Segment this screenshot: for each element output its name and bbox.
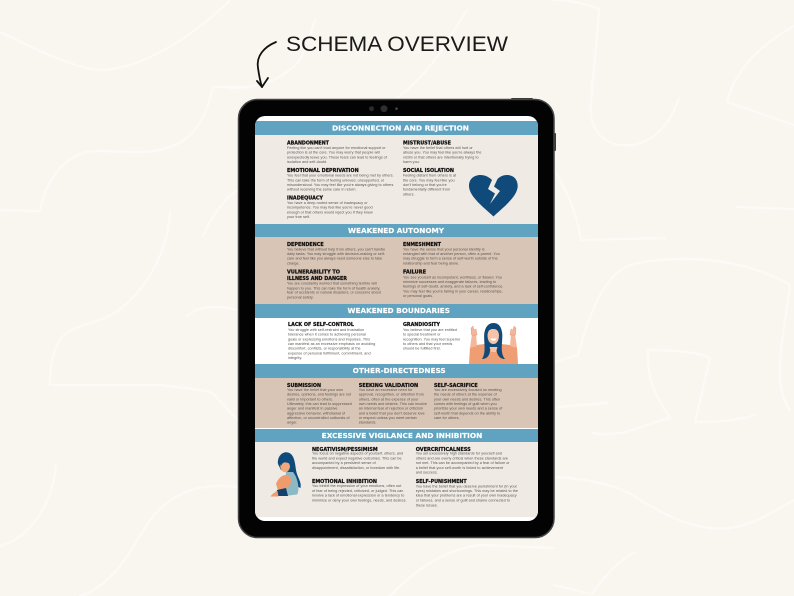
text: self-punishment: SELF-PUNISHMENT	[416, 479, 467, 485]
heading: disconnection and rejection: DISCONNECTION AND REJECTION	[332, 124, 469, 133]
heading: other-directedness: OTHER-DIRECTEDNESS	[353, 366, 446, 375]
text: seeking validation: approval, recognition, or attention from	[359, 393, 424, 397]
heading: excessive vigilance and inhibition	[255, 429, 538, 442]
text: negativism/pessimism: the world and expect negative outcomes. This can be	[312, 456, 402, 460]
text: mistrust/abuse: MISTRUST/ABUSE	[403, 140, 452, 146]
text: submission: anger and manifest in passive	[287, 407, 337, 411]
text: self-punishment	[416, 479, 518, 507]
text: submission: aggressive behavior, withdrawal of	[287, 411, 346, 415]
text: social isolation	[403, 168, 456, 196]
text: submission: affection, or uncontrolled outbursts of	[287, 416, 350, 420]
text: dependence: DEPENDENCE	[287, 242, 324, 248]
text: social isolation: don't belong or that you're	[403, 183, 447, 187]
text: abandonment: isolation and self-doubt.	[287, 160, 327, 164]
text: social isolation: others.	[403, 192, 415, 196]
panel: weakened boundaries	[255, 304, 538, 364]
icon: broken heart	[469, 175, 518, 216]
text: self-sacrifice: You are excessively focused on meeting	[434, 388, 502, 392]
text: self-punishment: eyes) mistakes and shortcomings. This may be related to the	[416, 489, 518, 493]
text: abandonment: unexpectedly leave you. These fears can lead to feelings of	[287, 155, 388, 159]
text: vulnerability to illness and danger: happen to you. This can take the form of health anxiety,	[287, 286, 380, 290]
text: negativism/pessimism: You focus on negative aspects of yourself, others, and	[312, 452, 403, 456]
text: self-sacrifice: comes with feelings of guilt when you	[434, 402, 497, 406]
text: seeking validation: others, often at the expense of your	[359, 397, 419, 401]
text: lack of self-control	[288, 322, 375, 360]
text: inadequacy: You have a deep-rooted sense of inadequacy or	[287, 201, 368, 205]
text: overcriticalness: and success.	[416, 471, 438, 475]
text: lack of self-control: goals or expressing emotions and impulses. This	[288, 337, 370, 341]
screen	[255, 116, 538, 521]
text: vulnerability to illness and danger: ILLNESS AND DANGER	[287, 276, 347, 282]
text: negativism/pessimism: NEGATIVISM/PESSIMISM	[312, 447, 378, 453]
text: emotional deprivation	[287, 168, 394, 192]
text: grandiosity: You believe that you are entitled	[403, 328, 457, 332]
camera	[369, 105, 398, 112]
arrow	[257, 42, 276, 87]
text: inadequacy	[287, 196, 373, 219]
text: abandonment: Feeling like you can't trust anyone for emotional support or	[287, 146, 386, 150]
text: inadequacy: your true self.	[287, 215, 310, 219]
text: emotional inhibition: minimize or deny your own feelings, needs, and desires.	[312, 499, 407, 503]
text: emotional deprivation: misunderstood. You may feel like you're always giving to others	[287, 183, 393, 187]
text: overcriticalness: OVERCRITICALNESS	[416, 447, 471, 453]
text: enmeshment: You have the sense that your personal identity is	[403, 247, 485, 251]
text: self-sacrifice: SELF-SACRIFICE	[434, 383, 478, 389]
text: seeking validation: SEEKING VALIDATION	[359, 383, 418, 389]
text: vulnerability to illness and danger: fear of accidents or natural disasters, or concerns about	[287, 291, 381, 295]
text: social isolation: Feeling distant from others is at	[403, 174, 456, 178]
text: lack of self-control: discomfort, conflicts, or responsibility at the	[288, 347, 361, 351]
text: vulnerability to illness and danger: VULNERABILITY TO	[287, 270, 340, 276]
text: submission: valid or important to others.	[287, 397, 333, 401]
heading: other-directedness	[255, 364, 538, 378]
text: inadequacy: INADEQUACY	[287, 196, 323, 202]
text: lack of self-control: can manifest as an excessive emphasis on avoiding	[288, 342, 375, 346]
text: mistrust/abuse: victim or that others are intentionally trying to	[403, 155, 479, 159]
text: seeking validation: and a belief that you don't deserve love	[359, 411, 425, 415]
text: dependence: daily tasks. You may struggle with decision-making or self-	[287, 252, 386, 256]
text: self-sacrifice: your own needs and desires. This often	[434, 397, 500, 401]
panel: excessive vigilance and inhibition	[255, 429, 538, 517]
text: dependence	[287, 242, 386, 265]
text: abandonment	[287, 140, 388, 164]
text: inadequacy: enough or that others would reject you if they knew	[287, 210, 373, 214]
text: submission: You have the belief that your own	[287, 388, 343, 392]
text: emotional inhibition: You inhibit the expression of your emotions, often out	[312, 484, 401, 488]
text: failure: minimize successes and exaggerate failures, leading to	[403, 280, 496, 284]
text: overcriticalness: not met. This can be accompanied by a fear of failure or	[416, 461, 510, 465]
text: grandiosity	[403, 322, 461, 351]
text: social isolation: fundamentally different from	[403, 188, 450, 192]
text: grandiosity: recognition. You may feel superior	[403, 337, 461, 341]
text: submission: SUBMISSION	[287, 383, 321, 389]
text: self-sacrifice: care for others.	[434, 416, 460, 420]
text: emotional inhibition	[312, 479, 407, 503]
panel: disconnection and rejection	[255, 121, 538, 224]
text: overcriticalness	[416, 447, 510, 475]
text: dependence: You believe that without help from others, you can't handle	[287, 247, 385, 251]
text: enmeshment: entangled with that of another person, often a parent. You	[403, 252, 500, 256]
text: self-punishment: You have the belief that you deserve punishment for (in your	[416, 484, 518, 488]
text: dependence: charge.	[287, 261, 300, 265]
text: failure: or personal goals.	[403, 294, 433, 298]
heading: weakened autonomy: WEAKENED AUTONOMY	[348, 226, 445, 235]
text: emotional inhibition: EMOTIONAL INHIBITION	[312, 479, 377, 485]
text: negativism/pessimism	[312, 447, 403, 470]
text: submission: Ultimately, this can lead to suppressed	[287, 402, 352, 406]
text: negativism/pessimism: accompanied by a persistent sense of	[312, 461, 377, 465]
text: overcriticalness: a belief that your self-worth is linked to achievement	[416, 466, 503, 470]
text: negativism/pessimism: disappointment, dissatisfaction, or boredom with life.	[312, 466, 400, 470]
text: self-punishment: idea that your problems are a result of your own inadequacy	[416, 494, 517, 498]
text: submission: anger.	[287, 421, 298, 425]
title: SCHEMA OVERVIEW	[286, 33, 508, 56]
text: failure	[403, 270, 503, 298]
text: enmeshment: relationship and fear being alone.	[403, 261, 459, 265]
heading: weakened autonomy	[255, 224, 538, 237]
text: dependence: care and feel like you always need someone else to take	[287, 257, 382, 261]
text: vulnerability to illness and danger: personal safety.	[287, 295, 314, 299]
text: self-sacrifice: prioritize your own needs and a sense of	[434, 407, 503, 411]
icon: woman hugging knees	[270, 452, 301, 496]
text: grandiosity: should be fulfilled first.	[403, 347, 441, 351]
heading: excessive vigilance and inhibition: EXCESSIVE VIGILANCE AND INHIBITION	[322, 431, 482, 440]
heading: disconnection and rejection	[255, 121, 538, 135]
text: seeking validation: own needs and desires. This can involve	[359, 402, 427, 406]
text: lack of self-control: expense of personal fulfillment, commitment, and	[288, 351, 371, 355]
text: self-sacrifice	[434, 383, 503, 420]
text: emotional deprivation: without receiving the same care in return.	[287, 188, 357, 192]
text: seeking validation: You have an excessive need for	[359, 388, 413, 392]
text: grandiosity: to others and that your needs	[403, 342, 453, 346]
text: emotional deprivation: This can take the form of feeling unloved, unsupported, or	[287, 178, 385, 182]
text: overcriticalness: You set excessively high standards for yourself and	[416, 452, 502, 456]
text: vulnerability to illness and danger: You are constantly worried that something terrible will	[287, 282, 377, 286]
text: social isolation: the core. You may feel like you	[403, 178, 455, 182]
text: self-sacrifice: self-worth that depends on the ability to	[434, 411, 500, 415]
text: seeking validation: or respect unless you meet certain	[359, 416, 417, 420]
text: overcriticalness: others and are overly critical when these standards are	[416, 456, 508, 460]
text: lack of self-control: LACK OF SELF-CONTROL	[288, 322, 355, 328]
text: emotional inhibition: involve a lack of emotional expression or a tendency to	[312, 494, 404, 498]
text: abandonment: protection is at the core. You may worry that people will	[287, 151, 380, 155]
text: abandonment: ABANDONMENT	[287, 140, 330, 146]
text: enmeshment: may struggle to form a sense of self-worth outside of the	[403, 257, 498, 261]
text: mistrust/abuse: abuse you. You may feel like you're always the	[403, 151, 481, 155]
text: emotional inhibition: of fear of being rejected, criticized, or judged. This can	[312, 489, 403, 493]
text: submission: desires, opinions, and feelings are not	[287, 393, 351, 397]
panel: other-directedness	[255, 364, 538, 428]
text: inadequacy: incompetence. You may feel like you're never good	[287, 206, 373, 210]
text: vulnerability to illness and danger	[287, 270, 381, 299]
text: failure: feelings of self-doubt, anxiety, and a lack of self-confidence.	[403, 285, 503, 289]
text: lack of self-control: integrity.	[288, 356, 302, 360]
text: mistrust/abuse	[403, 140, 481, 164]
text: seeking validation: an internal fear of rejection or criticism	[359, 407, 423, 411]
icon: woman with raised hands	[469, 323, 518, 364]
heading: weakened boundaries	[255, 304, 538, 318]
panel: weakened autonomy	[255, 224, 538, 304]
heading: weakened boundaries: WEAKENED BOUNDARIES	[348, 306, 450, 315]
text: enmeshment	[403, 242, 500, 265]
text: self-punishment: or failures, and a sense of guilt and shame connected to	[416, 499, 510, 503]
text: failure: FAILURE	[403, 270, 427, 276]
text: submission	[287, 383, 352, 425]
text: enmeshment: ENMESHMENT	[403, 242, 442, 248]
text: self-sacrifice: the needs of others at the expense of	[434, 393, 498, 397]
text: mistrust/abuse: harm you.	[403, 160, 420, 164]
text: seeking validation	[359, 383, 427, 425]
text: grandiosity: GRANDIOSITY	[403, 322, 440, 328]
text: social isolation: SOCIAL ISOLATION	[403, 168, 454, 174]
text: self-punishment: these issues.	[416, 503, 438, 507]
text: lack of self-control: tolerance when it comes to achieving personal	[288, 333, 366, 337]
text: lack of self-control: You struggle with self-restraint and frustration	[288, 328, 364, 332]
text: seeking validation: standards.	[359, 421, 376, 425]
text: mistrust/abuse: You have the belief that others will hurt or	[403, 146, 473, 150]
text: failure: You see yourself as incompetant, worthless, or flawed. You	[403, 275, 502, 279]
text: emotional deprivation: EMOTIONAL DEPRIVATION	[287, 168, 359, 174]
tablet	[238, 98, 556, 538]
text: failure: You may feel like you're failing in your career, relationships,	[403, 289, 503, 293]
text: emotional deprivation: You feel that your emotional needs are not being met by others.	[287, 174, 394, 178]
text: grandiosity: to special treatment or	[403, 333, 441, 337]
